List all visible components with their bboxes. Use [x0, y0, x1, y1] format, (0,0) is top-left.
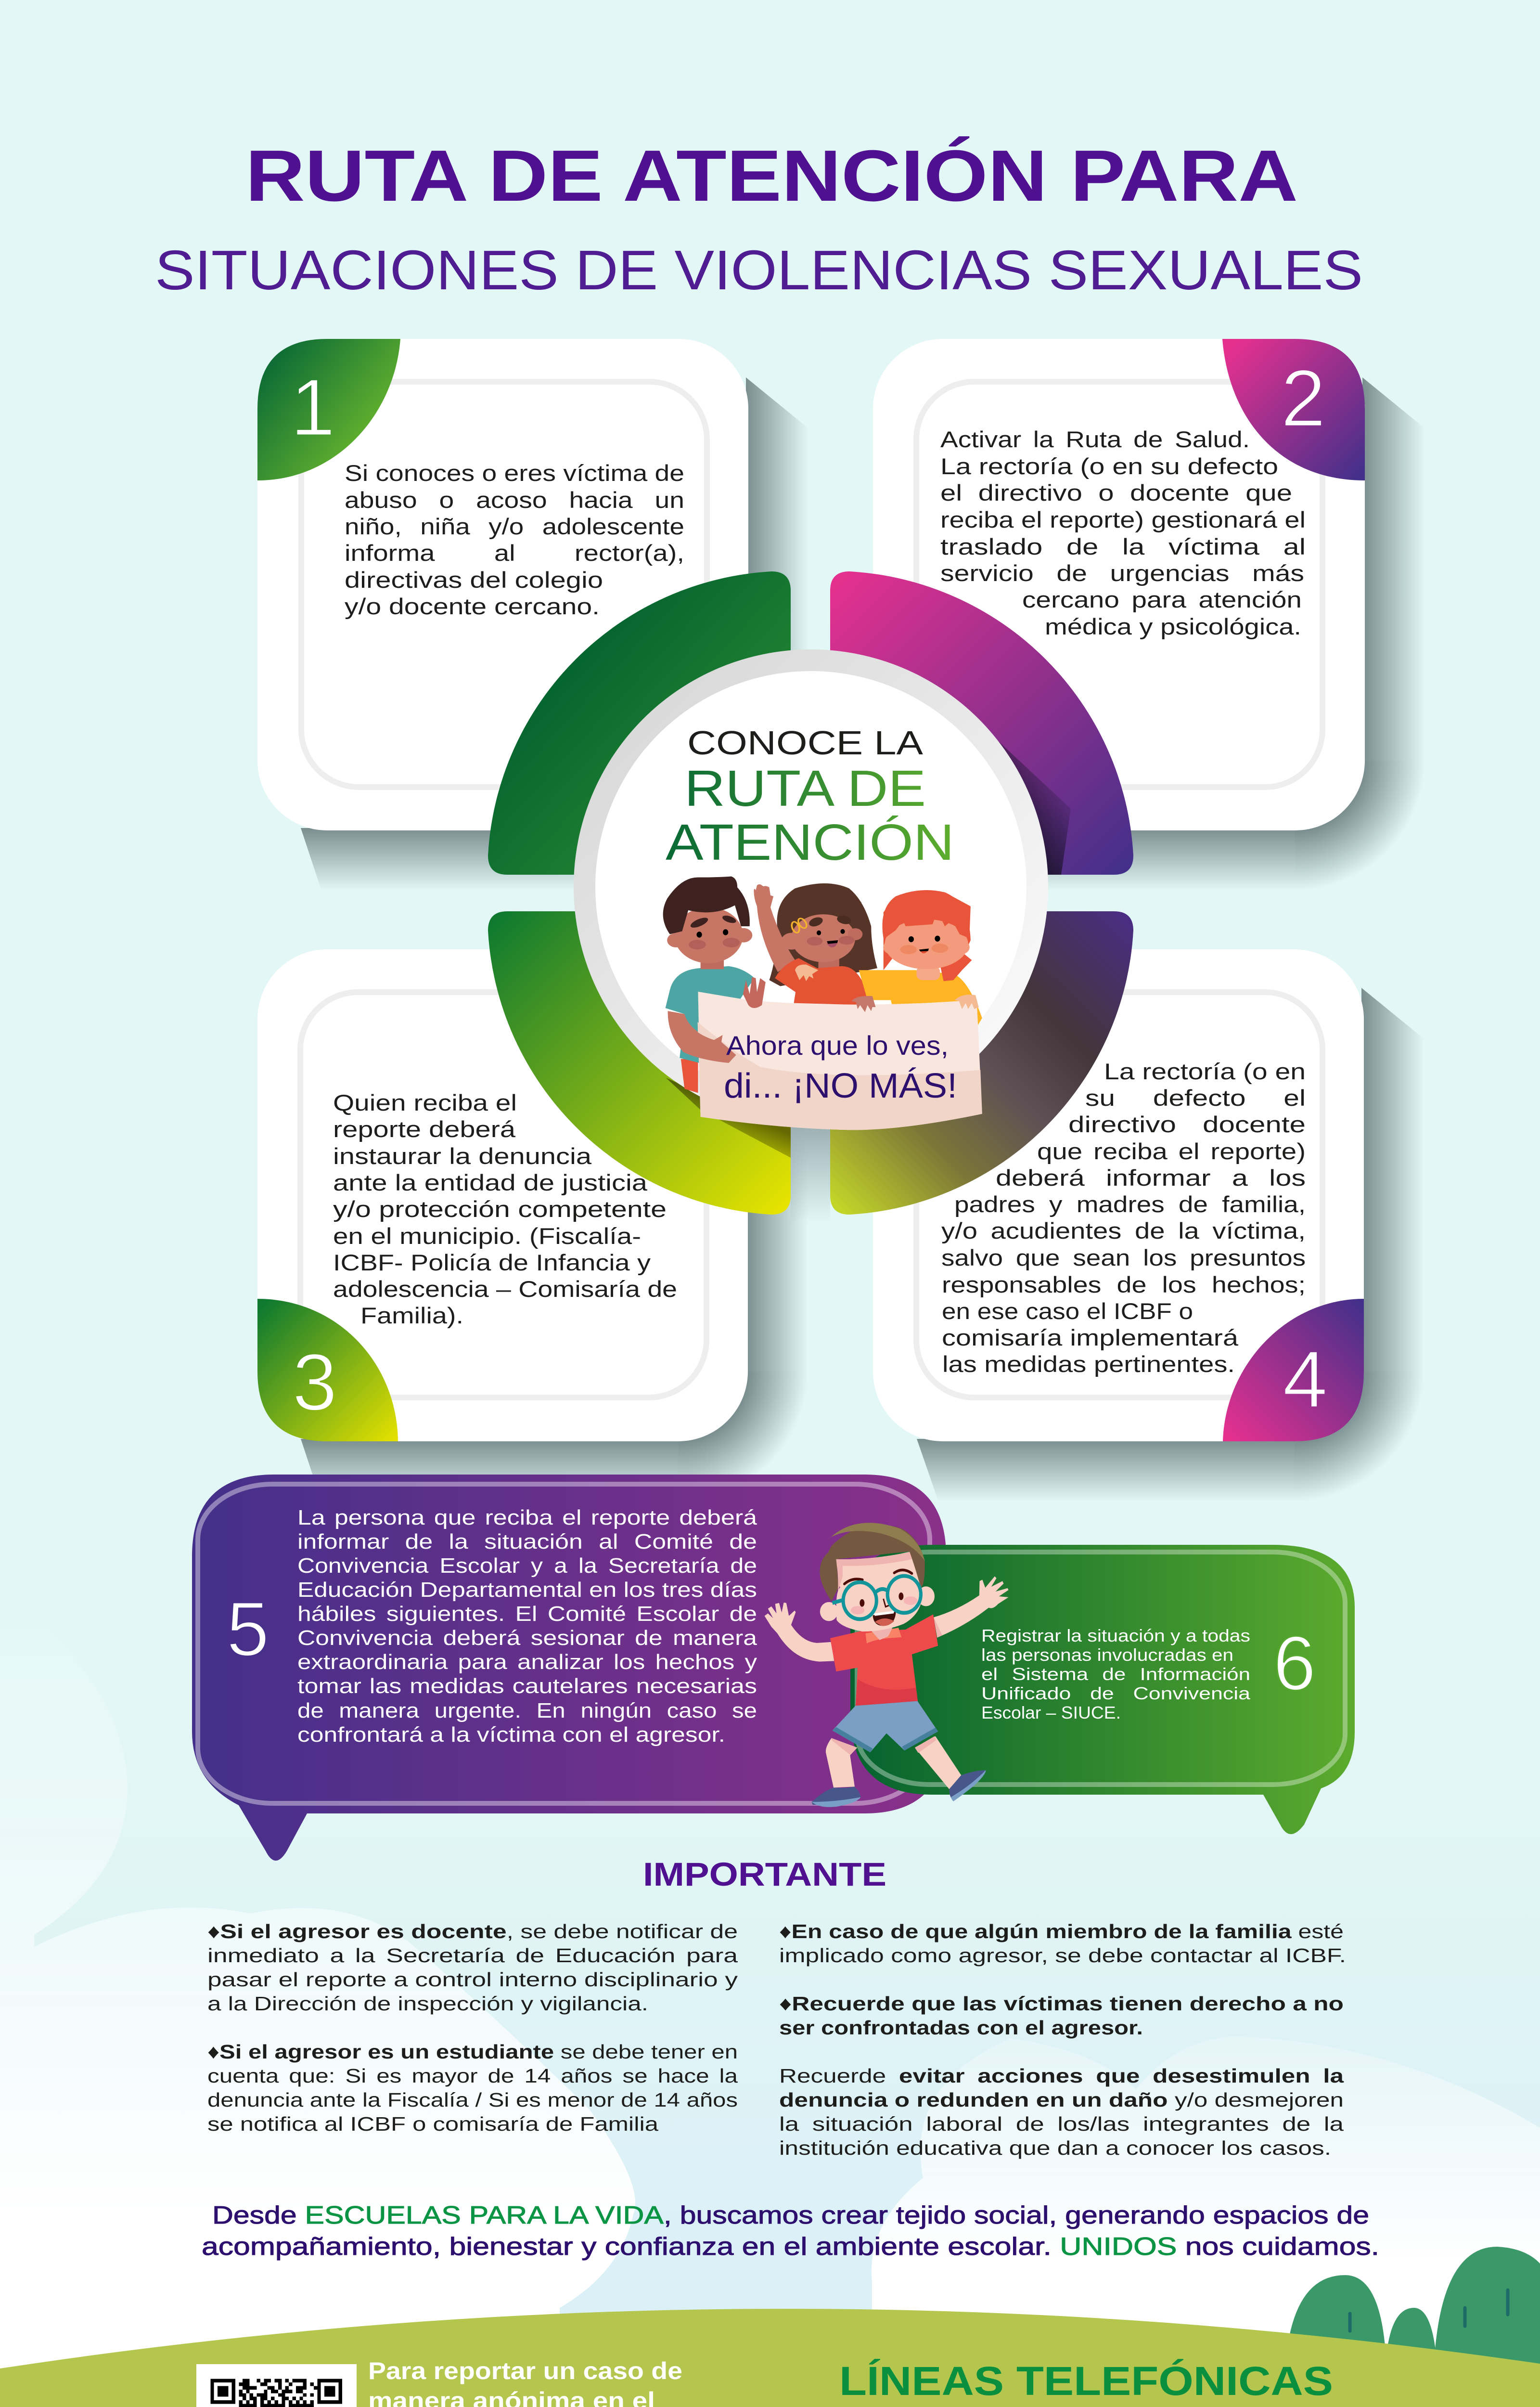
step 3 text: y/o protección competente: [333, 1196, 667, 1222]
shirt: [830, 1615, 938, 1706]
heading: líneas telefónicas: LÍNEAS TELEFÓNICAS: [839, 2358, 1333, 2404]
corner tab 2: [1222, 339, 1365, 480]
text block: left column notes: ♦Si el agresor es docente , se debe notificar de: [207, 1920, 738, 1942]
text block: right column notes: ♦En caso de que algún miembro de la familia esté: [779, 1920, 1344, 1942]
step 3 text: adolescencia – Comisaría de: [333, 1276, 677, 1302]
QR caption: Para reportar un caso de: [368, 2357, 682, 2384]
green hill: [0, 2309, 1540, 2407]
number 3: 3: [292, 1337, 337, 1427]
text block: right column notes: ser confrontadas con el agresor.: [779, 2017, 1143, 2039]
girl shirt: [775, 958, 868, 1005]
text block: left column notes: cuenta que: Si es mayor de 14 años se hace la: [207, 2065, 738, 2087]
wheel segment: green top left: [488, 571, 791, 875]
step 4 text: [941, 1059, 1306, 1377]
heading: importante: IMPORTANTE: [643, 1856, 886, 1893]
wheel segment: olive bottom right: [830, 911, 1133, 1215]
step 3 text: instaurar la denuncia: [333, 1143, 592, 1169]
text block: right column notes: Recuerde evitar acciones que desestimulen la: [779, 2065, 1344, 2087]
step 2 text: médica y psicológica.: [1045, 614, 1301, 639]
step 5 text: Educación Departamental en los tres días: [297, 1578, 757, 1602]
step 4 text: deberá informar a los: [996, 1165, 1306, 1191]
text block: right column notes: denuncia o redunden en un daño y/o desmejoren: [779, 2089, 1344, 2111]
banner: [698, 992, 982, 1130]
text block: left column notes: se notifica al ICBF o comisaría de Familia: [207, 2113, 658, 2135]
centre heading: ruta de atención: RUTA DE: [684, 760, 926, 817]
step 4 text: directivo docente: [1068, 1112, 1306, 1137]
closing message: acompañamiento, bienestar y confianza en el ambiente escolar. UNIDOS nos cuidamos.: [202, 2233, 1379, 2261]
text block: right column notes: ♦Recuerde que las víctimas tienen derecho a no: [779, 1993, 1344, 2015]
gap shadow between lower segments: [791, 1126, 830, 1223]
step 4 text: en ese caso el ICBF o: [942, 1298, 1193, 1324]
step 3 text: ante la entidad de justicia: [333, 1170, 648, 1195]
step 1 text: [345, 460, 684, 619]
wheel segment: lime bottom left: [488, 911, 791, 1215]
boy: [681, 1059, 698, 1093]
step 3 text: en el municipio. (Fiscalía-: [333, 1223, 641, 1249]
step 5 text: La persona que reciba el reporte deberá: [297, 1506, 757, 1529]
text block: left column notes: ♦Si el agresor es un estudiante se debe tener en: [207, 2041, 738, 2063]
text block: left column notes: pasar el reporte a control interno disciplinario y: [207, 1968, 738, 1991]
text block: left column notes: inmediato a la Secretaría de Educación para: [207, 1944, 738, 1967]
banner text: Ahora que lo ves,: [726, 1030, 949, 1061]
text block: right column notes: [779, 1920, 1346, 2159]
panel: step 5 speech bubble: [192, 1475, 946, 1861]
number 1: 1: [290, 362, 335, 453]
title: RUTA DE ATENCIÓN PARA: [245, 135, 1298, 216]
number 6: 6: [1273, 1620, 1316, 1706]
step 5 text: Convivencia deberá sesionar de manera: [297, 1626, 757, 1650]
girl back hair and raised arm: [769, 883, 877, 986]
arms and legs: [765, 1603, 834, 1662]
step 4 text: La rectoría (o en: [1104, 1059, 1306, 1084]
corner tab 4: [1223, 1299, 1364, 1441]
text block: right column notes: la situación laboral de los/las integrantes de la: [779, 2113, 1344, 2135]
panel: step 2 card: [873, 339, 1425, 891]
centre disc: [595, 671, 1027, 1102]
step 1 text: abuso o acoso hacia un: [345, 487, 684, 513]
centre heading: conoce la: CONOCE LA: [687, 724, 923, 762]
step 3 text: [333, 1090, 677, 1328]
central wheel: [488, 571, 1133, 1223]
step 4 text: y/o acudientes de la víctima,: [941, 1218, 1306, 1243]
hands over banner: [743, 977, 766, 1008]
panel: step 6 speech bubble: [850, 1545, 1355, 1834]
step 5 text: [297, 1506, 757, 1747]
step 2 text: reciba el reporte) gestionará el: [940, 507, 1306, 532]
step 6 text: el Sistema de Información: [981, 1664, 1250, 1684]
text block: right column notes: implicado como agresor, se debe contactar al ICBF.: [779, 1944, 1346, 1967]
step 4 text: las medidas pertinentes.: [942, 1351, 1235, 1377]
banner text: [724, 1030, 957, 1105]
centre heading: ruta de atención: ATENCIÓN: [666, 814, 954, 871]
step 6 text: Escolar – SIUCE.: [981, 1703, 1121, 1722]
corner tab 1: [257, 339, 400, 480]
step 2 text: La rectoría (o en su defecto: [940, 453, 1278, 479]
illustration: boy with glasses: [765, 1523, 1009, 1807]
shoes: [812, 1786, 860, 1805]
text block: left column notes: [207, 1920, 738, 2135]
shorts: [833, 1701, 938, 1752]
step 6 text: Unificado de Convivencia: [981, 1683, 1251, 1703]
step 6 text: las personas involucradas en: [981, 1645, 1233, 1665]
step 5 text: hábiles siguientes. El Comité Escolar de: [297, 1602, 757, 1626]
step 3 text: ICBF- Policía de Infancia y: [333, 1250, 651, 1275]
text block: left column notes: a la Dirección de inspección y vigilancia.: [207, 1993, 648, 2015]
panel: step 3 card: [257, 949, 808, 1501]
step 6 text: Registrar la situación y a todas: [981, 1626, 1250, 1645]
step 4 text: que reciba el reporte): [1037, 1139, 1306, 1164]
step 2 text: Activar la Ruta de Salud.: [940, 427, 1250, 452]
panel: step 4 card: [873, 949, 1424, 1501]
closing message: Desde ESCUELAS PARA LA VIDA , buscamos crear tejido social, generando espacios de: [212, 2201, 1369, 2229]
step 5 text: informar de la situación al Comité de: [297, 1530, 757, 1553]
banner text: di... ¡NO MÁS!: [724, 1067, 957, 1105]
step 5 text: Convivencia Escolar y a la Secretaría de: [297, 1554, 757, 1578]
illustration: three children holding a banner: [663, 876, 982, 1130]
step 5 text: extraordinaria para analizar los hechos y: [297, 1650, 757, 1674]
corner tab 3: [257, 1299, 398, 1441]
step 1 text: directivas del colegio: [345, 567, 603, 593]
step 4 text: salvo que sean los presuntos: [941, 1245, 1306, 1270]
step 1 text: informa al rector(a),: [345, 540, 684, 566]
step 1 text: Si conoces o eres víctima de: [345, 460, 684, 486]
step 3 text: Quien reciba el: [333, 1090, 517, 1115]
bubble 6 body: [850, 1545, 1355, 1834]
step 5 text: tomar las medidas cautelares necesarias: [297, 1674, 757, 1698]
text block: right column notes: institución educativa que dan a conocer los casos.: [779, 2137, 1331, 2159]
step 5 text: de manera urgente. En ningún caso se: [297, 1699, 757, 1722]
subtitle: SITUACIONES DE VIOLENCIAS SEXUALES: [155, 239, 1363, 301]
step 6 text: [981, 1626, 1251, 1722]
step 2 text: [940, 427, 1306, 639]
step 2 text: cercano para atención: [1022, 587, 1302, 612]
QR code: [196, 2364, 357, 2407]
step 1 text: y/o docente cercano.: [345, 594, 600, 619]
wheel segment: magenta top right: [830, 571, 1133, 875]
bubble 5 inner outline: [198, 1484, 930, 1803]
number 4: 4: [1283, 1334, 1328, 1424]
step 2 text: traslado de la víctima al: [940, 534, 1306, 559]
step 2 text: servicio de urgencias más: [940, 560, 1304, 586]
number 5: 5: [227, 1586, 269, 1672]
step 1 text: niño, niña y/o adolescente: [345, 514, 684, 539]
step 4 text: padres y madres de familia,: [954, 1191, 1306, 1217]
panel: step 1 card: [257, 339, 808, 891]
centre heading: ruta de atención: [666, 760, 954, 871]
number 2: 2: [1281, 353, 1326, 443]
step 2 text: el directivo o docente que: [940, 480, 1292, 505]
glasses: [833, 1576, 921, 1619]
QR caption: [368, 2357, 694, 2407]
step 4 text: comisaría implementará: [942, 1325, 1239, 1350]
step 4 text: responsables de los hechos;: [942, 1272, 1306, 1297]
step 3 text: reporte deberá: [333, 1116, 516, 1142]
bubble 5 body: [192, 1475, 946, 1861]
closing message: [202, 2201, 1379, 2261]
bubble 6 inner outline: [857, 1552, 1345, 1785]
step 5 text: confrontará a la víctima con el agresor.: [297, 1723, 725, 1747]
bushes behind the hill, top right: [1286, 2247, 1540, 2383]
centre ring: [574, 649, 1048, 1124]
text block: left column notes: denuncia ante la Fiscalía / Si es menor de 14 años: [207, 2089, 738, 2111]
redhead: [859, 970, 982, 1025]
step 3 text: Familia).: [360, 1303, 463, 1328]
head: [820, 1602, 838, 1621]
step 4 text: su defecto el: [1085, 1085, 1306, 1111]
